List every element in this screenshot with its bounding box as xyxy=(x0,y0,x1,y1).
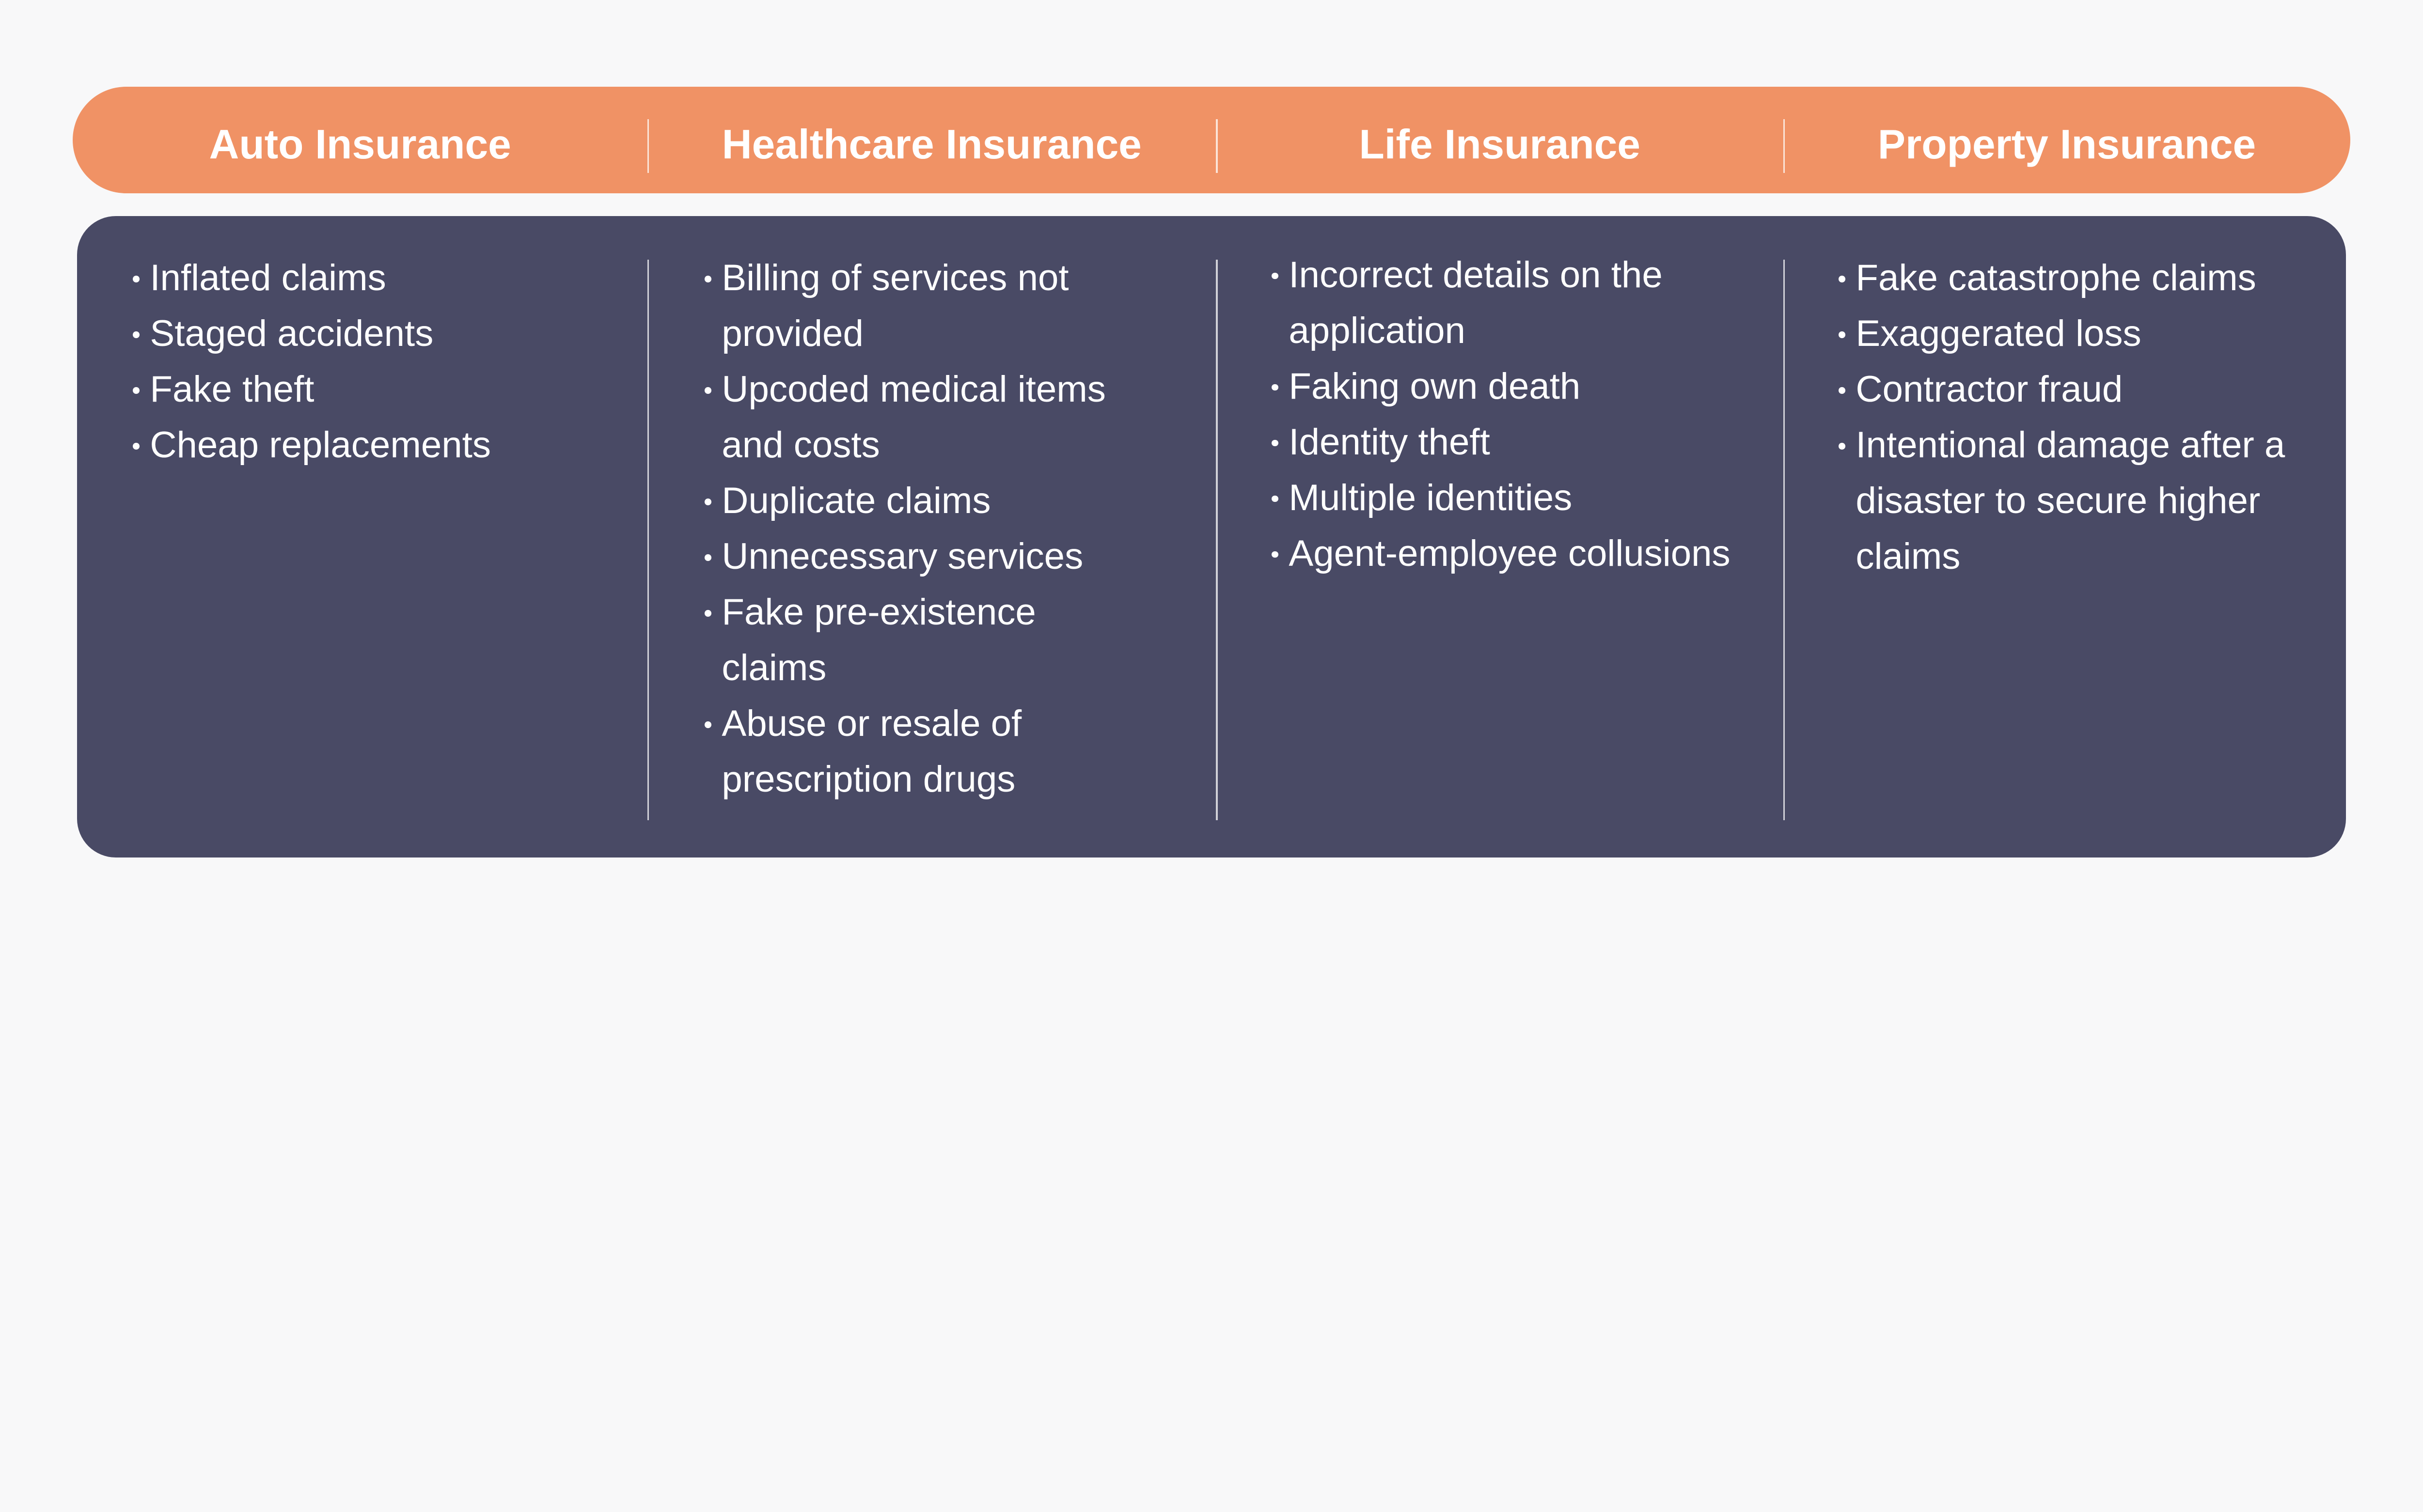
list: healthcare insurance: Abuse or resale of xyxy=(722,703,1022,744)
list: life insurance: Multiple identities xyxy=(1289,477,1572,518)
list: auto insurance: Fake theft xyxy=(150,369,314,410)
list: life insurance: Faking own death xyxy=(1289,366,1580,407)
list: healthcare insurance: and costs xyxy=(722,424,880,466)
list: property insurance: Fake catastrophe claims xyxy=(1856,257,2256,298)
heading: Healthcare Insurance: Healthcare Insurance xyxy=(722,121,1142,168)
list: life insurance xyxy=(1272,254,1731,574)
header bar xyxy=(73,87,2350,193)
list: healthcare insurance: prescription drugs xyxy=(722,759,1015,800)
heading: Property Insurance: Property Insurance xyxy=(1878,121,2256,168)
heading: Life Insurance: Life Insurance xyxy=(1359,121,1640,168)
list: life insurance: Agent-employee collusions xyxy=(1289,533,1731,574)
list: life insurance: Identity theft xyxy=(1289,421,1490,463)
list: healthcare insurance: Billing of services not xyxy=(722,257,1069,298)
list: property insurance: Exaggerated loss xyxy=(1856,313,2141,354)
list: property insurance: claims xyxy=(1856,536,1960,577)
list: life insurance: Incorrect details on the xyxy=(1289,254,1663,296)
list: property insurance: disaster to secure higher xyxy=(1856,480,2260,521)
heading: Auto Insurance: Auto Insurance xyxy=(209,121,511,168)
list: auto insurance: Inflated claims xyxy=(150,257,386,298)
list: life insurance: application xyxy=(1289,310,1465,351)
list: property insurance xyxy=(1839,257,2285,577)
list: healthcare insurance: Fake pre-existence xyxy=(722,592,1036,633)
list: healthcare insurance: provided xyxy=(722,313,864,354)
list: auto insurance xyxy=(133,257,491,466)
list: healthcare insurance: Unnecessary services xyxy=(722,536,1083,577)
list: property insurance: Intentional damage after a xyxy=(1856,424,2285,466)
list: property insurance: Contractor fraud xyxy=(1856,369,2123,410)
panel: content xyxy=(77,216,2346,857)
list: auto insurance: Cheap replacements xyxy=(150,424,491,466)
list: auto insurance: Staged accidents xyxy=(150,313,433,354)
list: healthcare insurance: Duplicate claims xyxy=(722,480,991,521)
list: healthcare insurance xyxy=(705,257,1106,800)
list: healthcare insurance: Upcoded medical items xyxy=(722,369,1106,410)
list: healthcare insurance: claims xyxy=(722,647,826,688)
